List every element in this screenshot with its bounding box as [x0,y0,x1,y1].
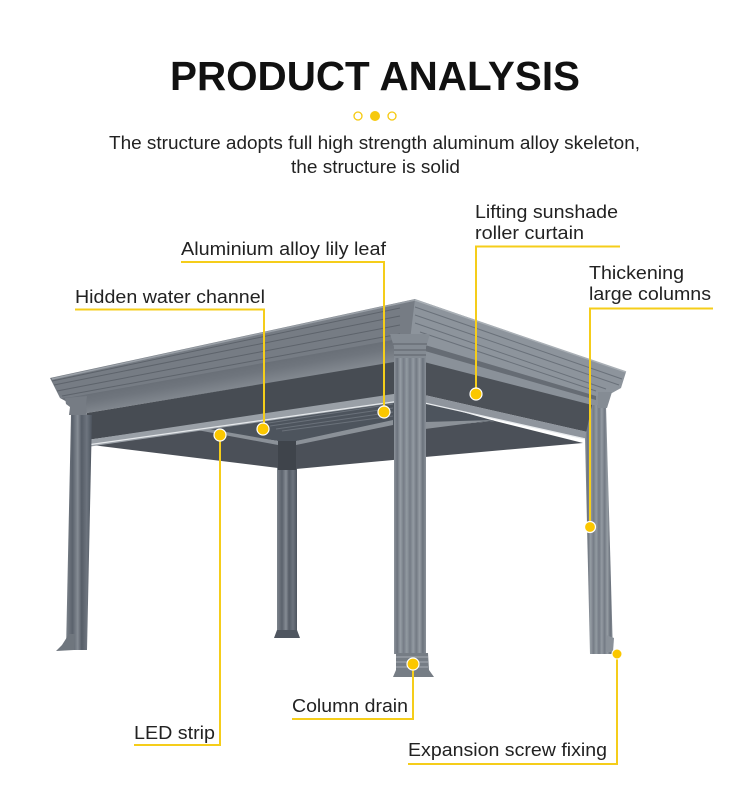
callout: aluminium alloy lily leaf: Aluminium alloy lily leaf [181,239,387,259]
left corner column [56,396,92,651]
subtitle: The structure adopts full high strength aluminum alloy skeleton, [109,133,640,153]
callout: lifting sunshade roller curtain: Lifting sunshade [475,202,618,222]
decorative dots [354,111,396,121]
subtitle: the structure is solid [291,157,460,177]
back-left under panel [92,428,278,468]
callout: thickening large columns: Thickening [589,263,684,283]
callout: lifting sunshade roller curtain [470,202,620,400]
back column joint [278,441,296,470]
front right fascia [410,336,606,408]
front left beam [87,393,400,447]
front left fascia [60,336,410,413]
illustration: pergola [50,299,626,677]
callout: expansion screw fixing [408,649,622,764]
louvre roof [197,400,495,445]
subtitle [109,133,640,177]
right corner column [585,392,614,654]
front left curtain panel [87,361,400,440]
callout: column drain: Column drain [292,696,408,716]
callout: hidden water channel: Hidden water channel [75,287,265,307]
callout: LED strip [134,429,226,745]
roof cornice right [410,299,626,396]
front right beam [420,394,592,440]
back-right under panel [296,421,583,469]
callout: hidden water channel [75,287,269,435]
callout: lifting sunshade roller curtain: roller curtain [475,223,584,243]
callout: aluminium alloy lily leaf [181,239,390,418]
back left column [274,440,300,638]
callout: thickening large columns: large columns [589,284,711,304]
callout: thickening large columns [584,263,713,532]
front right curtain panel [420,361,596,434]
callout: column drain [292,658,419,719]
title: PRODUCT ANALYSIS [170,53,580,99]
callout: expansion screw fixing: Expansion screw fixing [408,740,607,760]
front centre column [390,334,434,677]
callout: LED strip: LED strip [134,723,215,743]
roof cornice left [50,299,415,398]
